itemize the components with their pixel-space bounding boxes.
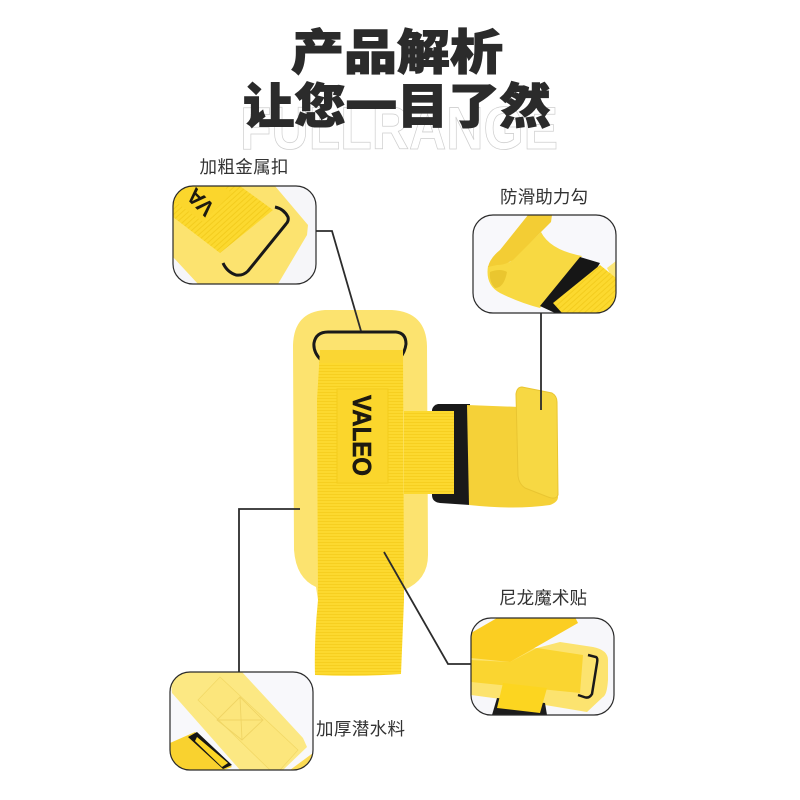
callout: nylon velcro xyxy=(471,588,614,715)
inset photo: VA xyxy=(181,183,220,221)
line: neoprene xyxy=(239,509,300,672)
inset frame xyxy=(473,215,616,313)
logo text: VALEO xyxy=(347,395,377,476)
inset frame xyxy=(471,618,614,715)
main product: wrist strap with hook xyxy=(293,310,558,676)
inset frame xyxy=(173,186,316,284)
pad xyxy=(293,310,428,600)
hook body xyxy=(467,405,558,508)
title: 产品解析 xyxy=(291,27,503,80)
label: 尼龙魔术贴 xyxy=(499,588,587,608)
inset frame xyxy=(170,672,313,770)
side strap xyxy=(404,411,456,494)
leader lines xyxy=(239,231,541,672)
line: hook xyxy=(540,313,542,410)
line: velcro xyxy=(384,552,471,664)
callout: thick neoprene xyxy=(170,672,405,770)
callout: anti-slip hook xyxy=(473,187,616,313)
black buckle xyxy=(432,404,470,505)
main strap xyxy=(315,350,404,676)
inset photo xyxy=(173,183,316,284)
label: 加厚潜水料 xyxy=(316,719,405,739)
strap fold xyxy=(320,350,403,363)
label: 防滑助力勾 xyxy=(500,187,588,207)
logo patch xyxy=(337,389,388,483)
title xyxy=(243,27,551,134)
watermark: FULLRANGE outline text: FULLRANGE xyxy=(240,95,558,162)
title: 让您一目了然 xyxy=(243,81,551,134)
inset photo xyxy=(471,617,614,715)
inset photo xyxy=(170,672,313,770)
metal ring xyxy=(314,332,406,360)
callout: metal buckle xyxy=(173,157,316,284)
hook flap xyxy=(516,387,558,498)
line: metal buckle xyxy=(309,231,361,331)
label: 加粗金属扣 xyxy=(200,157,288,177)
inset photo xyxy=(488,216,616,312)
